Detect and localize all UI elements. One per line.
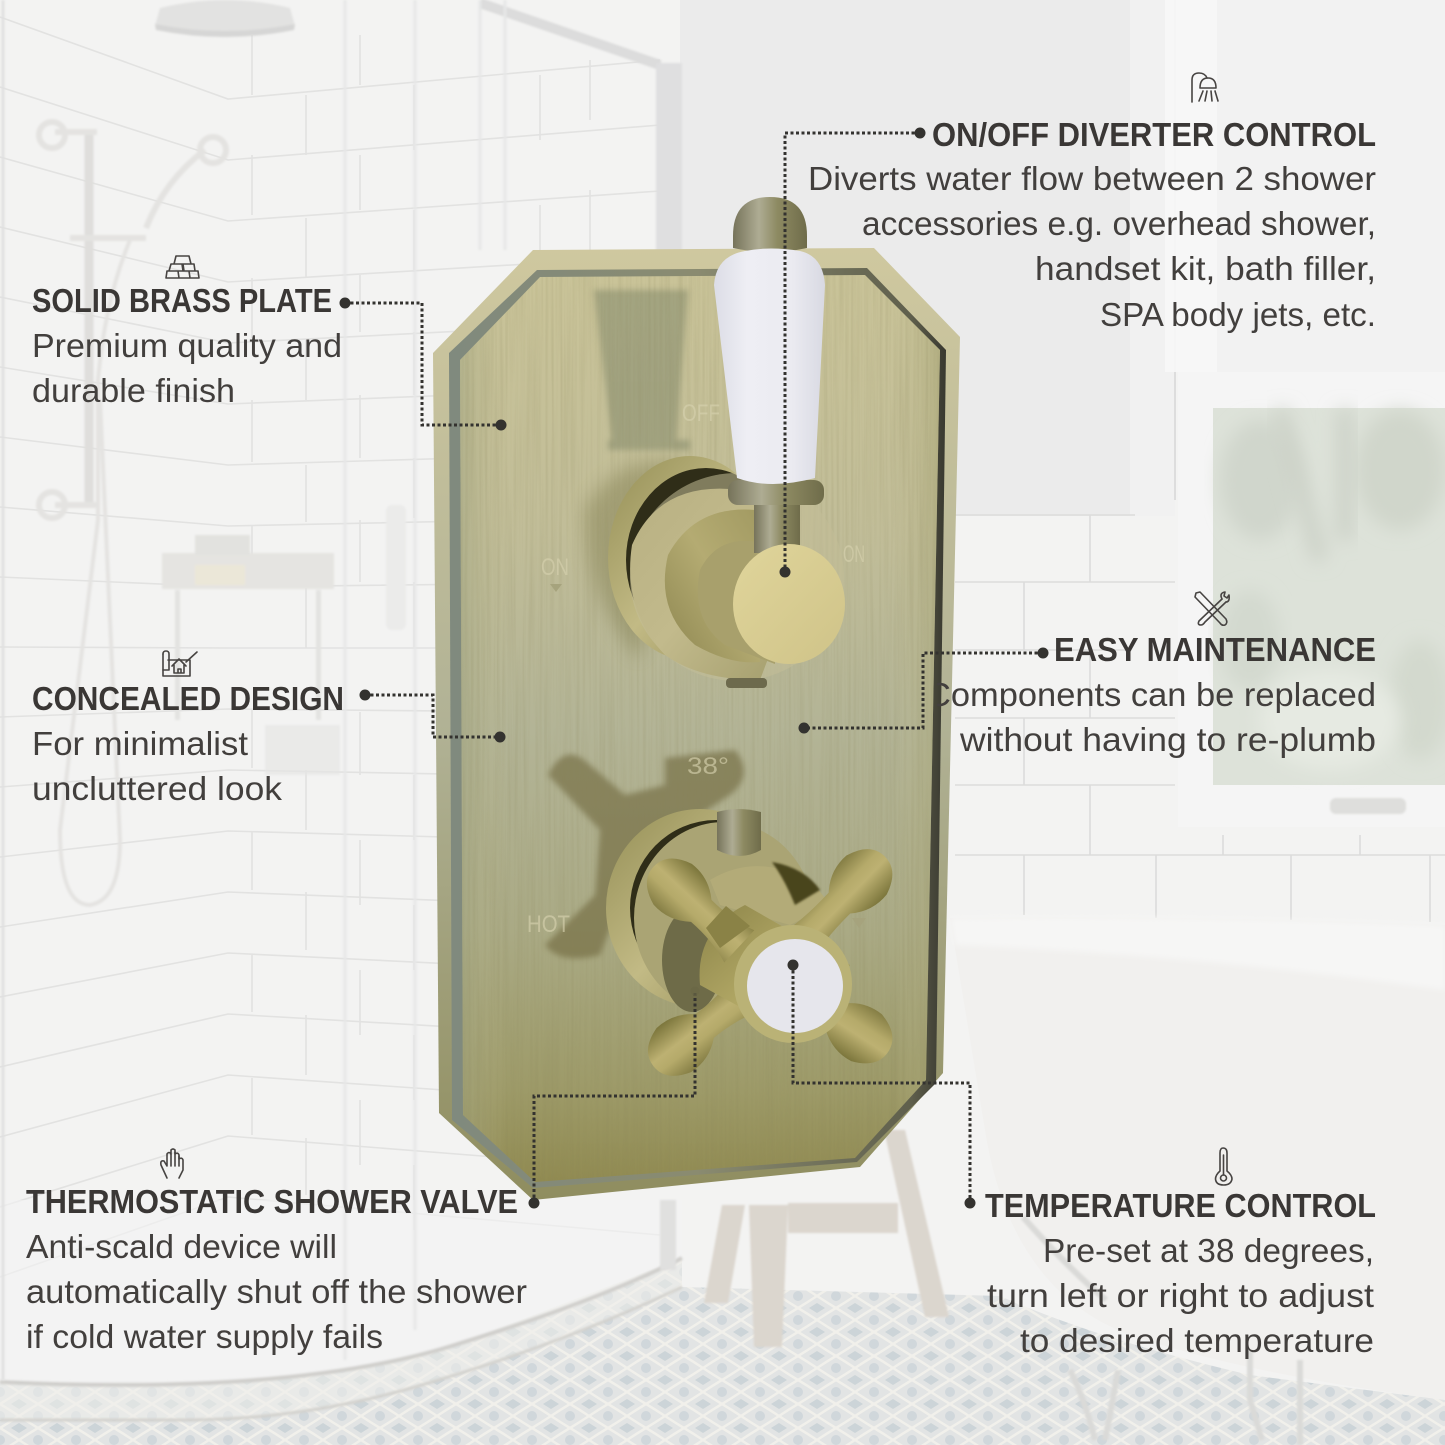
outer rim bbox=[433, 248, 960, 1200]
pin bbox=[717, 809, 761, 856]
engraved labels bbox=[527, 400, 866, 938]
bath feet bbox=[1023, 1217, 1300, 1445]
arm lower left bbox=[636, 971, 764, 1088]
collar behind cross bbox=[710, 866, 830, 925]
reflected shadows bbox=[430, 240, 970, 1210]
text block: Components can be replaced bbox=[926, 676, 1376, 713]
engraved labels: ON bbox=[541, 554, 569, 581]
stool bbox=[704, 1130, 949, 1347]
text block bbox=[808, 160, 1376, 333]
knob body bbox=[630, 489, 790, 680]
callout: concealed design bbox=[32, 651, 344, 807]
text block: Diverts water flow between 2 shower bbox=[808, 160, 1376, 197]
shower tray interior bbox=[0, 1200, 682, 1383]
text block bbox=[939, 682, 1374, 758]
door handle bbox=[386, 505, 406, 630]
glass door frames bbox=[3, 0, 682, 1380]
leader: temperature control bbox=[788, 960, 976, 1208]
central barrel bbox=[700, 905, 850, 1040]
text block: turn left or right to adjust bbox=[987, 1277, 1374, 1314]
text block: Premium quality and bbox=[32, 327, 342, 364]
right wall bbox=[1177, 0, 1445, 372]
porcelain cap bbox=[734, 925, 852, 1043]
text block: handset kit, bath filler, bbox=[1035, 250, 1376, 287]
lower cross handle bbox=[606, 809, 905, 1088]
text block bbox=[987, 1232, 1374, 1359]
engraved labels: 38° bbox=[687, 753, 729, 780]
heading: EASY MAINTENANCE bbox=[1054, 631, 1376, 668]
heading: ON/OFF DIVERTER CONTROL bbox=[932, 116, 1376, 153]
arm upper left bbox=[634, 846, 759, 967]
leader: solid brass plate bbox=[340, 298, 506, 430]
icon: crossed tools bbox=[1195, 592, 1229, 625]
text block: durable finish bbox=[32, 372, 235, 409]
porcelain handle bbox=[714, 248, 825, 484]
icon: blueprint house bbox=[163, 651, 197, 676]
text block: SPA body jets, etc. bbox=[1100, 296, 1376, 333]
text block: accessories e.g. overhead shower, bbox=[862, 205, 1376, 242]
reflection bbox=[662, 908, 722, 1012]
rain head bbox=[155, 0, 295, 37]
icon: shower bbox=[1192, 73, 1218, 102]
shower valve plate bbox=[430, 197, 970, 1210]
heading: SOLID BRASS PLATE bbox=[32, 282, 332, 319]
text block: if cold water supply fails bbox=[26, 1318, 383, 1355]
text block bbox=[32, 725, 283, 807]
text block: Pre-set at 38 degrees, bbox=[1043, 1232, 1374, 1269]
text block: uncluttered look bbox=[32, 770, 283, 807]
lever dome bbox=[733, 197, 807, 252]
callout: temperature control bbox=[985, 1148, 1376, 1359]
heading: TEMPERATURE CONTROL bbox=[985, 1187, 1376, 1224]
right tiles bbox=[955, 515, 1445, 922]
floor bbox=[0, 1258, 1445, 1445]
groove bbox=[449, 268, 946, 1188]
lever stem bbox=[754, 505, 800, 553]
corner shelf bbox=[162, 535, 340, 775]
bath bbox=[950, 917, 1445, 1400]
plate face bbox=[460, 275, 940, 1182]
bearing ring bbox=[630, 473, 844, 681]
tray band bbox=[0, 1258, 682, 1420]
text block bbox=[32, 327, 342, 409]
leader: on/off diverter bbox=[780, 128, 926, 578]
callout: solid brass plate bbox=[32, 256, 342, 409]
heading: CONCEALED DESIGN bbox=[32, 680, 344, 717]
leader: easy maintenance bbox=[798, 648, 1048, 734]
text block: automatically shut off the shower bbox=[26, 1273, 527, 1310]
callout: thermostatic shower valve bbox=[26, 1149, 527, 1355]
nub bbox=[726, 678, 767, 688]
shower tile wall lines bbox=[0, 17, 660, 1277]
centre wall bbox=[680, 0, 1175, 516]
text block: without having to re-plumb bbox=[959, 721, 1376, 758]
icon: thermometer bbox=[1216, 1148, 1232, 1185]
lever collar bbox=[728, 480, 824, 505]
text block: to desired temperature bbox=[1020, 1322, 1374, 1359]
text block: For minimalist bbox=[32, 725, 248, 762]
arm lower right bbox=[780, 968, 904, 1075]
engraved labels: ON bbox=[843, 541, 865, 568]
flange bbox=[606, 809, 794, 1007]
leader: concealed design bbox=[360, 690, 506, 742]
inner step bbox=[665, 510, 760, 662]
shower riser and hand set bbox=[39, 122, 226, 905]
engraved labels: HOT bbox=[527, 911, 570, 938]
text block: Anti-scald device will bbox=[26, 1228, 337, 1265]
arm upper right bbox=[771, 837, 905, 973]
disc bbox=[733, 544, 845, 664]
heading: THERMOSTATIC SHOWER VALVE bbox=[26, 1183, 518, 1220]
inner cylinder bbox=[698, 541, 775, 664]
callout: easy maintenance bbox=[926, 592, 1376, 758]
icon: hand bbox=[161, 1149, 183, 1178]
window bbox=[1178, 372, 1445, 827]
engraved labels: OFF bbox=[682, 400, 720, 427]
text block bbox=[26, 1228, 527, 1355]
upper diverter knob bbox=[608, 197, 845, 688]
leader: thermostatic valve bbox=[528, 986, 700, 1208]
icon: gold bars bbox=[166, 256, 199, 278]
flange bbox=[608, 456, 772, 660]
callout: on/off diverter control bbox=[808, 73, 1376, 333]
